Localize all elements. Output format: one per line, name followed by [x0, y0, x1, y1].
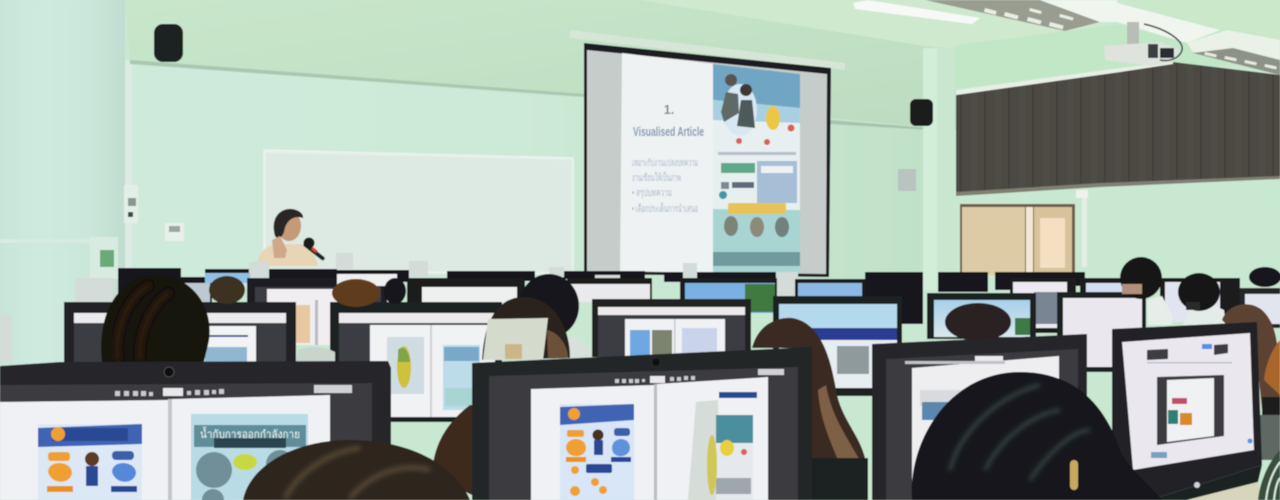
third row monitors — [64, 288, 1280, 422]
projection screen — [570, 30, 845, 277]
slide text — [633, 102, 704, 139]
speaker right — [910, 99, 933, 126]
student with dark hair front left — [101, 275, 210, 362]
presenter — [257, 209, 325, 266]
whiteboard — [264, 150, 573, 274]
front monitor left — [0, 361, 391, 500]
green striped shirt — [1258, 450, 1280, 500]
wall box — [898, 169, 916, 191]
projection screen: งานเขียนให้เป็นภาพ — [632, 170, 681, 184]
right side woman — [1222, 304, 1280, 460]
slide text: Visualised Article — [633, 125, 704, 139]
floor — [1187, 482, 1262, 500]
back row monitors — [118, 268, 1085, 324]
ceiling lights — [853, 0, 1280, 75]
center right infographic — [707, 415, 753, 500]
infographic page right: น้ำกับการออกกำลังกาย — [200, 426, 300, 441]
ceiling and upper right wall — [640, 0, 1280, 92]
projection screen: • เลือกประเด็นการนำเสนอ — [632, 201, 698, 215]
front monitor right — [1112, 322, 1262, 500]
second row monitors — [118, 273, 1240, 345]
projection screen: เหมาะกับงานแปลงบทความ — [632, 158, 698, 169]
door — [960, 190, 1088, 275]
front head right — [912, 372, 1162, 500]
center left infographic — [560, 404, 634, 500]
projector — [1104, 22, 1182, 66]
vertical blinds — [956, 62, 1280, 196]
slide white part — [620, 53, 714, 273]
long hair woman — [752, 318, 868, 500]
projection screen: • สรุปบทความ — [632, 188, 672, 199]
woman with paper — [433, 297, 570, 495]
desk name cards — [0, 253, 798, 362]
front head center-left — [243, 440, 470, 500]
infographic on slide — [713, 64, 800, 273]
speaker left — [154, 24, 183, 62]
back students — [209, 257, 1280, 362]
thermostat — [165, 223, 184, 241]
front monitor right middle — [872, 334, 1087, 500]
infographic page left — [38, 424, 142, 500]
slide text: 1. — [664, 102, 674, 117]
infographic page right — [191, 414, 308, 500]
front monitor center — [472, 347, 812, 500]
column left — [0, 0, 138, 365]
